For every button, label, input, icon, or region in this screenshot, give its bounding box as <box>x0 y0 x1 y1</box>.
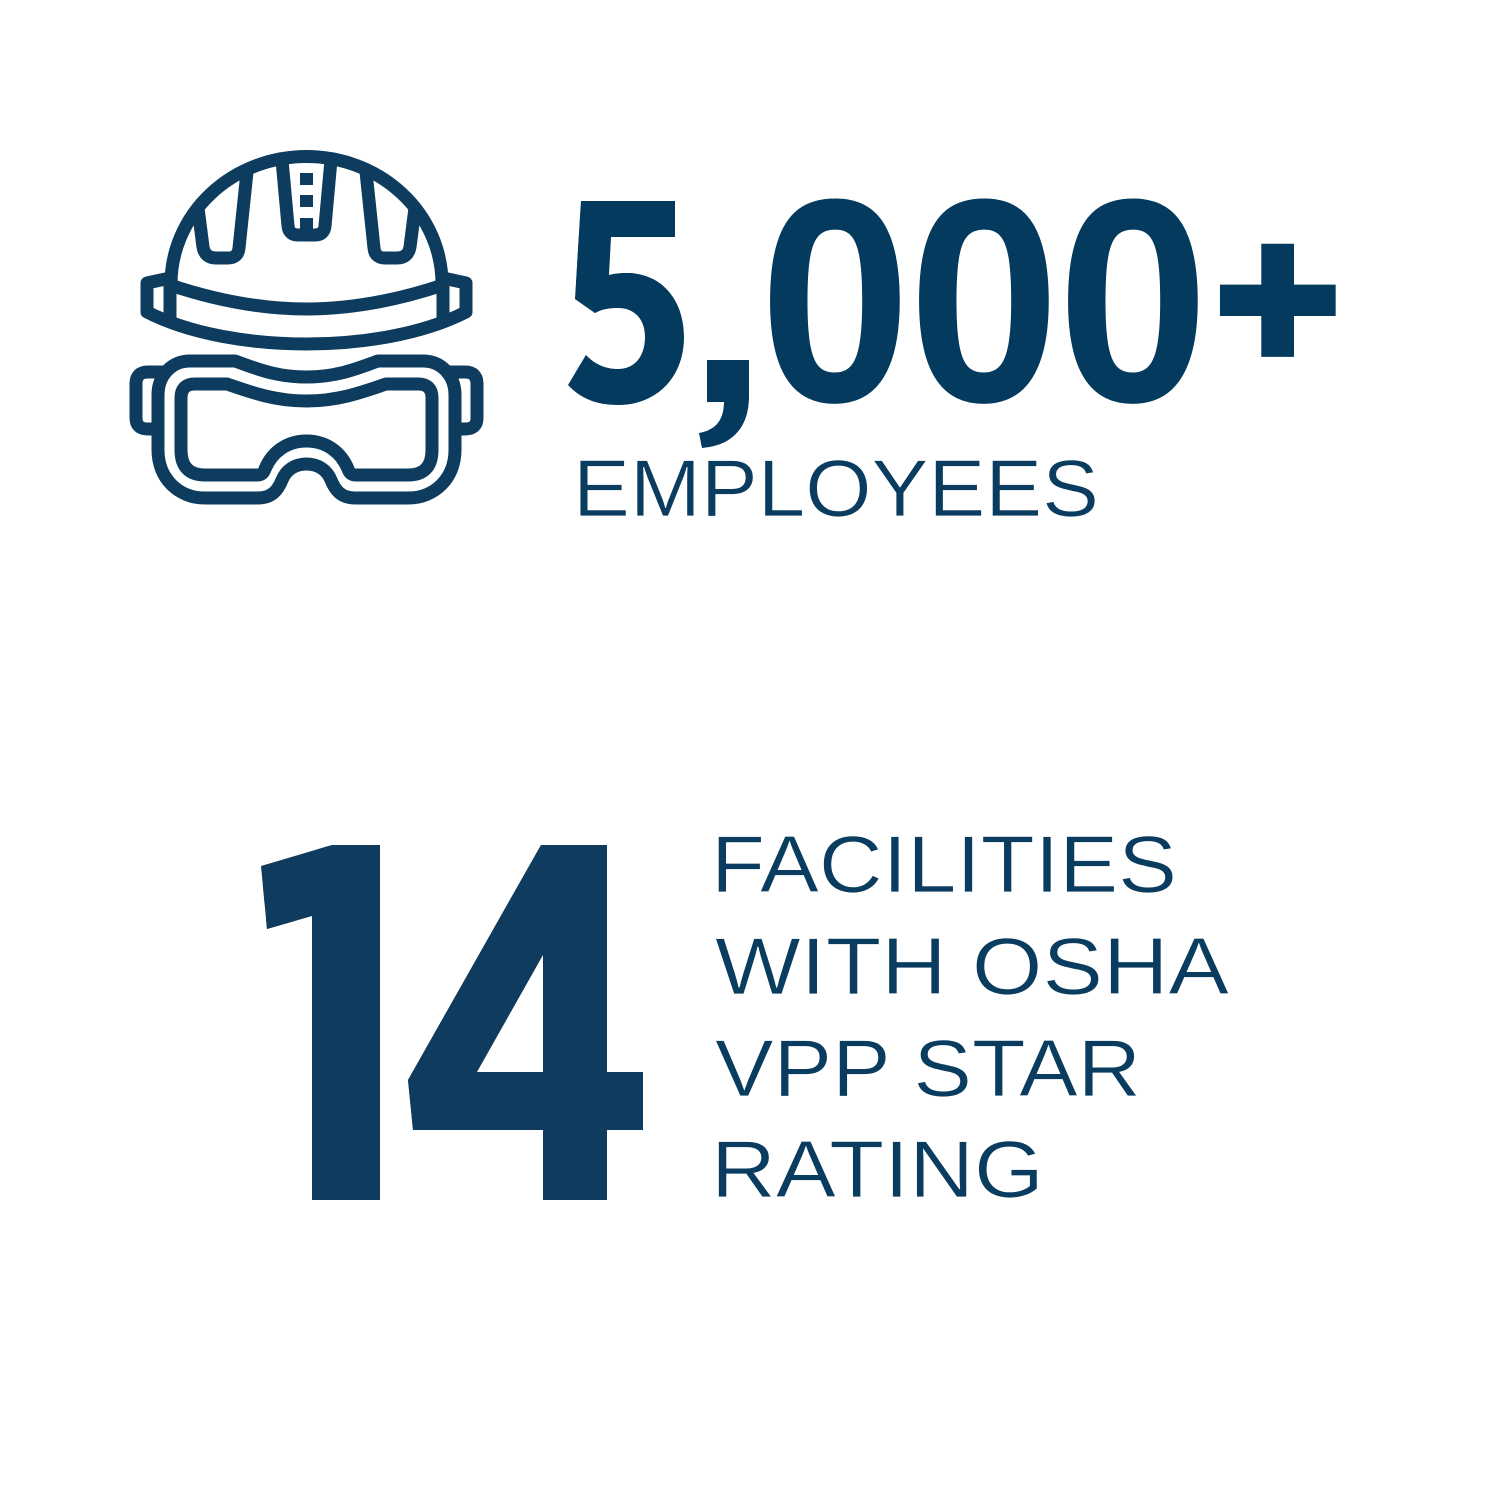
stat: 5,000+: + <box>1216 184 1340 413</box>
stat: 5,000+: 5 <box>563 144 685 462</box>
label: facilities with OSHA VPP Star rating: WITH OSHA <box>715 922 1229 1012</box>
label: employees: EMPLOYEES <box>573 444 1099 534</box>
icon: hard hat and safety goggles <box>136 157 477 498</box>
stat: 5,000+: 0 <box>1057 138 1209 463</box>
stat: 14: 4 <box>400 734 649 1309</box>
stat: 5,000+: 0 <box>908 138 1060 463</box>
icon: safety goggles <box>136 361 477 498</box>
stat: 5,000+ <box>568 198 1336 448</box>
stat: 5,000+: , <box>680 145 759 461</box>
icon: hard hat <box>147 157 466 344</box>
label: facilities with OSHA VPP Star rating <box>711 820 1229 1215</box>
stat: 14: 1 <box>199 735 485 1310</box>
label: facilities with OSHA VPP Star rating: FACILITIES <box>711 820 1177 910</box>
stat: 14 <box>261 845 643 1200</box>
label: facilities with OSHA VPP Star rating: RATING <box>711 1125 1044 1215</box>
label: facilities with OSHA VPP Star rating: VPP STAR <box>715 1024 1141 1114</box>
stat: 5,000+: 0 <box>759 138 911 463</box>
